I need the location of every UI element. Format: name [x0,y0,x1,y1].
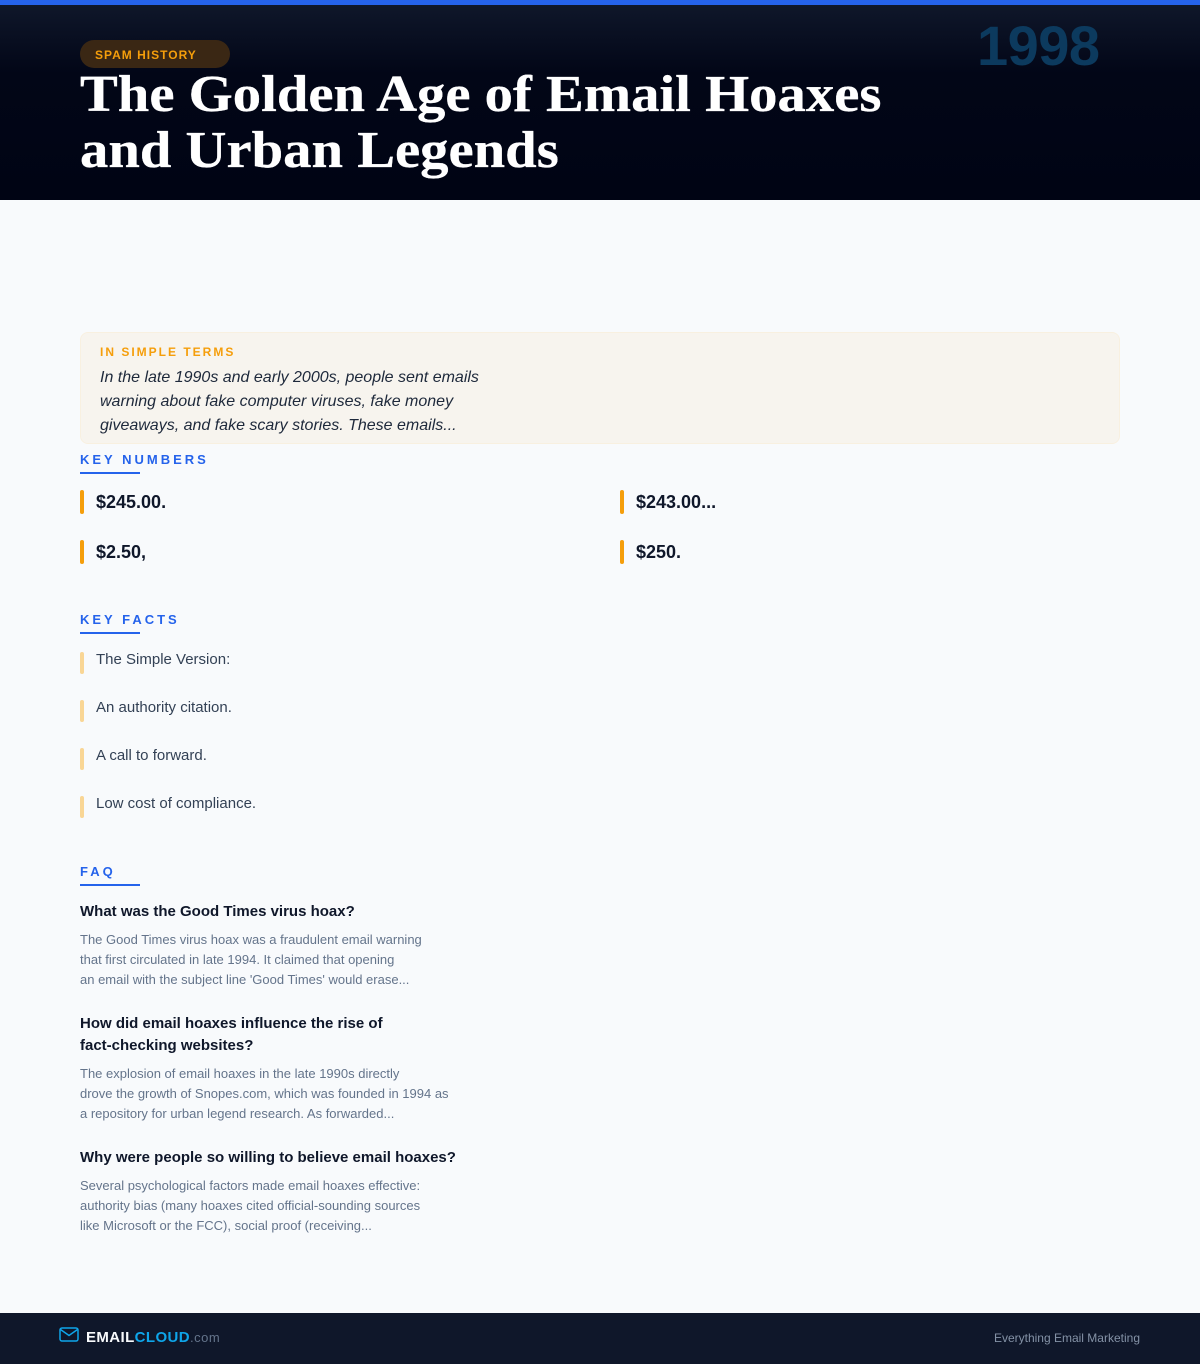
title [80,66,881,179]
category pill [80,40,230,68]
footer [0,1313,1200,1364]
faq 2 answer: a repository for urban legend research. As forwarded... [80,1106,394,1121]
faq 2 question: fact-checking websites? [80,1037,253,1054]
section heading: key facts: KEY FACTS [80,612,180,627]
panel: in simple terms [80,332,1120,444]
stat: $245.00.: $245.00. [96,492,166,512]
stat: $2.50,: $2.50, [96,542,146,562]
fact: low cost: Low cost of compliance. [96,795,256,812]
faq 2 answer: The explosion of email hoaxes in the late 1990s directly [80,1066,399,1081]
faq 2 answer: drove the growth of Snopes.com, which was founded in 1994 as [80,1086,449,1101]
category pill: SPAM HISTORY [95,48,197,62]
section heading: faq: FAQ [80,864,116,879]
stat: $243.00...: $243.00... [636,492,716,512]
summary text: In the late 1990s and early 2000s, people sent emails [100,369,479,386]
title: and Urban Legends [80,122,559,179]
year watermark: 1998 [977,14,1100,77]
icon: envelope [59,1327,79,1342]
fact: authority citation: An authority citation. [96,699,232,716]
faq 1 question: What was the Good Times virus hoax? [80,903,355,920]
panel label: IN SIMPLE TERMS [100,345,235,359]
faq 3 question: Why were people so willing to believe email hoaxes? [80,1149,456,1166]
summary text: giveaways, and fake scary stories. These emails... [100,417,457,434]
fact: simple version: The Simple Version: [96,651,230,668]
faq 1 answer: The Good Times virus hoax was a fraudulent email warning [80,932,422,947]
tagline: Everything Email Marketing [994,1331,1140,1345]
faq 1 answer: that first circulated in late 1994. It claimed that opening [80,952,394,967]
faq 1 answer [80,932,422,987]
title: The Golden Age of Email Hoaxes [80,66,881,123]
section heading: key numbers: KEY NUMBERS [80,452,209,467]
summary text [100,369,479,434]
faq 3 answer [80,1178,420,1233]
faq 3 answer: authority bias (many hoaxes cited official-sounding sources [80,1198,420,1213]
faq 2 question [80,1015,383,1054]
faq 3 answer: like Microsoft or the FCC), social proof (receiving... [80,1218,372,1233]
header band [0,0,1200,200]
summary text: warning about fake computer viruses, fake money [100,393,453,410]
faq 3 answer: Several psychological factors made email hoaxes effective: [80,1178,420,1193]
stat: $250.: $250. [636,542,681,562]
faq 2 question: How did email hoaxes influence the rise of [80,1015,383,1032]
faq 2 answer [80,1066,449,1121]
fact: call to forward: A call to forward. [96,747,207,764]
faq 1 answer: an email with the subject line 'Good Times' would erase... [80,972,409,987]
brand name: EMAILCLOUD.com [86,1329,220,1346]
